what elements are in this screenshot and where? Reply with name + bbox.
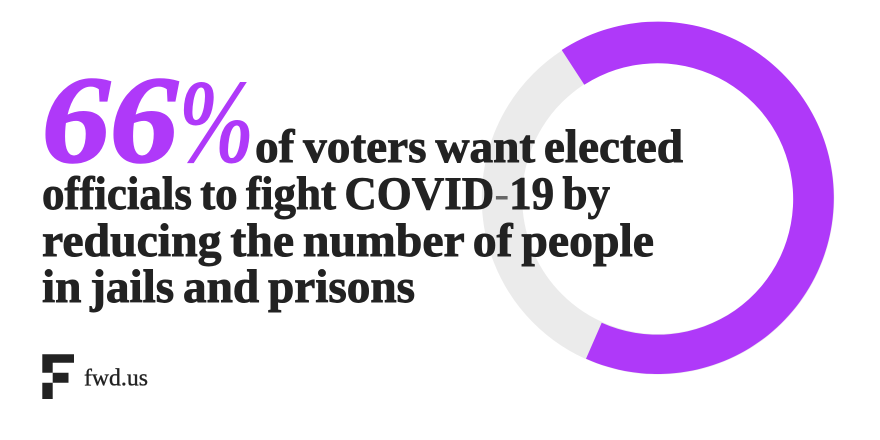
headline text [42, 121, 683, 313]
icon: F mark [42, 354, 74, 399]
headline line 4: in jails and prisons [42, 261, 415, 313]
logo: fwd.us [42, 354, 148, 399]
headline statistic: 66% [42, 52, 254, 188]
statistic digits: 66 [42, 52, 178, 188]
donut remainder segment [502, 42, 814, 354]
headline line 3: reducing the number of people [42, 215, 654, 267]
headline line 1: of voters want elected [255, 121, 683, 173]
headline line 2: officials to fight COVID-19 by [42, 168, 610, 220]
donut 66 percent segment [562, 22, 834, 374]
statistic percent sign: % [178, 55, 254, 188]
logo wordmark: fwd.us [84, 366, 148, 392]
donut chart: 66 percent [502, 22, 834, 374]
